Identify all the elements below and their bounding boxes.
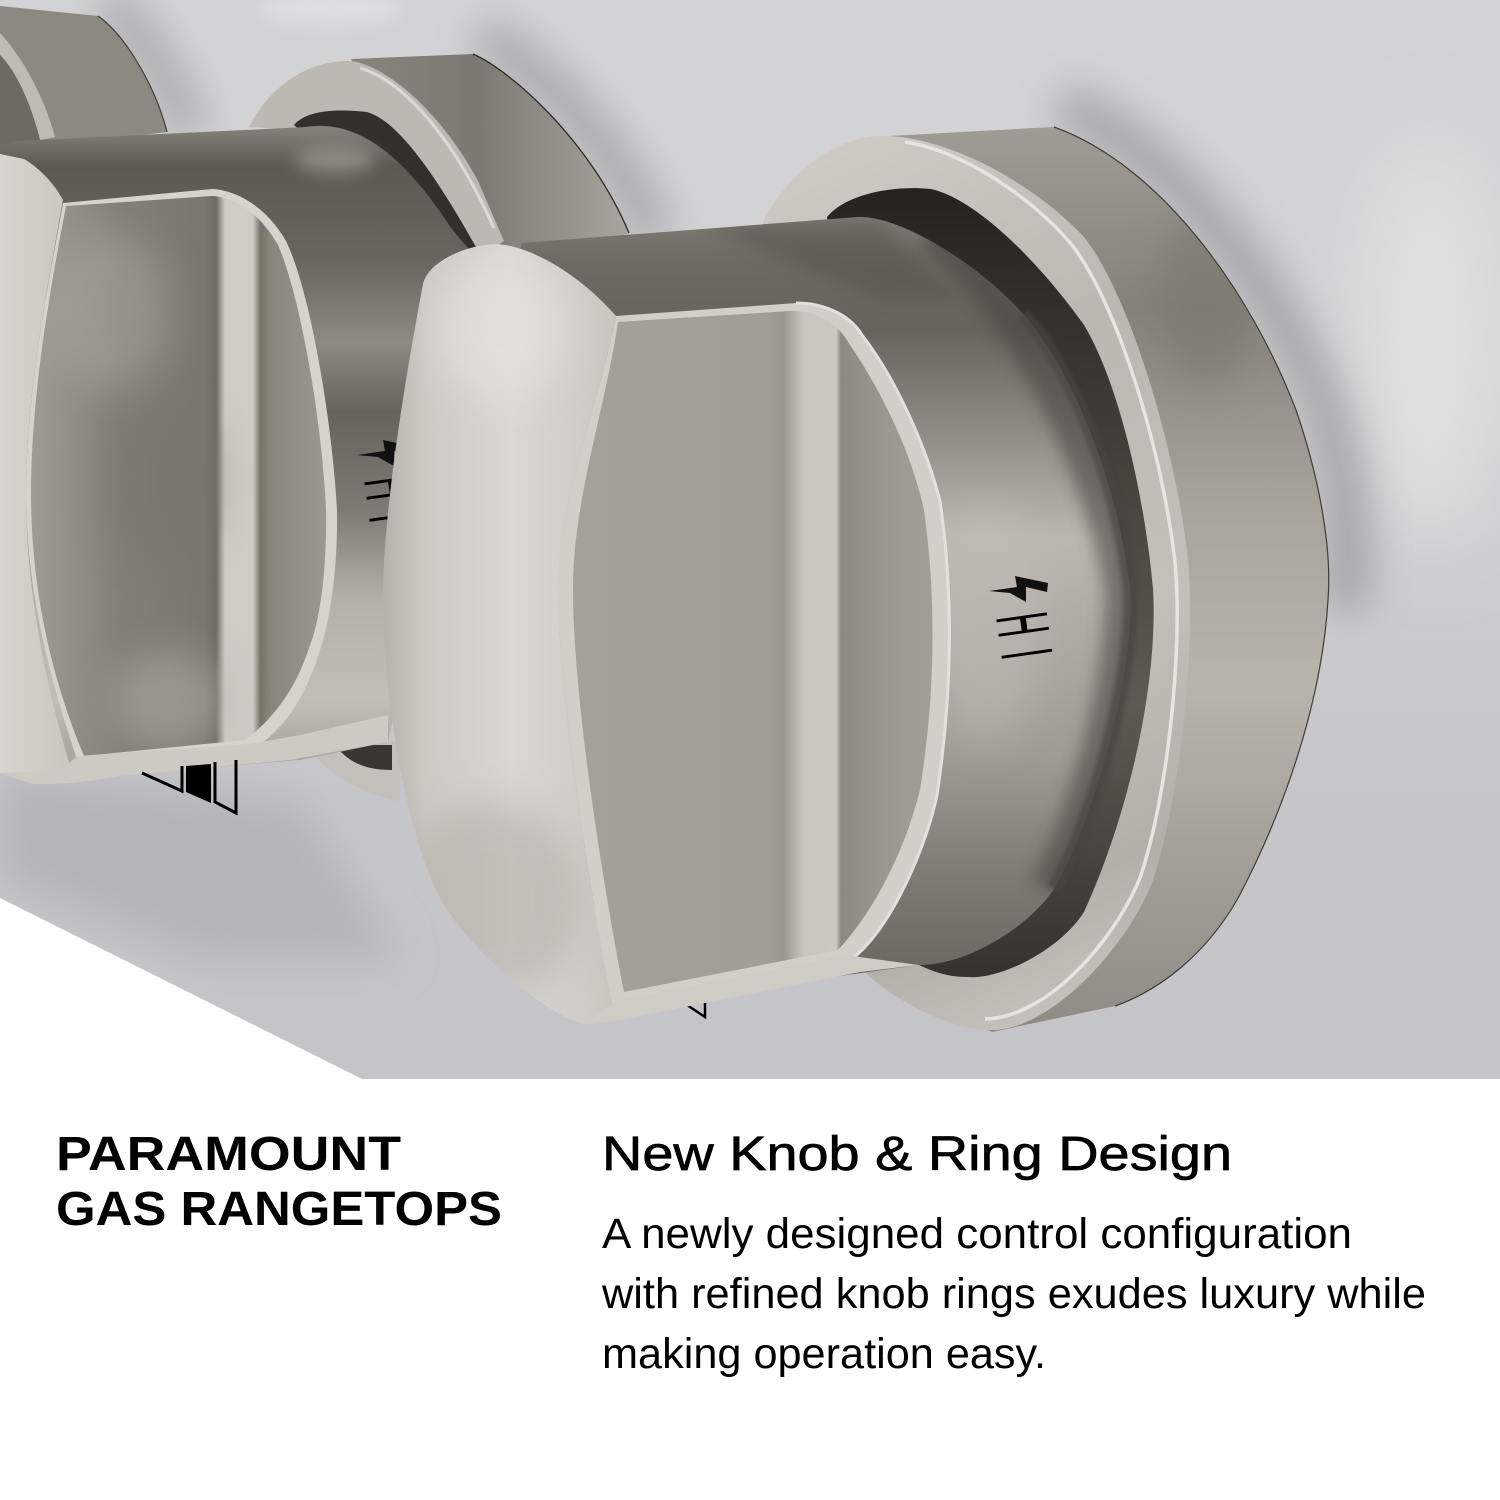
panel logo mark — [142, 760, 705, 1017]
middle knob: HI mark: HI — [347, 471, 437, 541]
feature heading: New Knob & Ring Design — [602, 1128, 1232, 1181]
middle knob: ring recess — [294, 110, 476, 248]
middle knob: stem — [0, 126, 480, 779]
middle knob: base cylinder — [351, 54, 628, 249]
middle knob — [0, 54, 629, 801]
middle knob: ring face — [249, 61, 504, 260]
middle knob: grip — [26, 189, 337, 762]
description line 3: making operation easy. — [602, 1330, 1046, 1378]
middle knob: lower ring — [310, 740, 400, 801]
steel panel background — [0, 0, 1500, 1080]
front knob: ring recess — [827, 188, 1154, 977]
front knob: HI mark — [989, 576, 1052, 659]
middle knob: HI mark — [358, 440, 396, 522]
front knob: grip — [558, 303, 949, 1024]
front knob: left lobe — [383, 244, 616, 1024]
front knob: ring face — [763, 136, 1190, 1030]
description line 2: with refined knob rings exudes luxury while — [601, 1270, 1426, 1318]
product title — [56, 1128, 502, 1236]
front knob: stem — [500, 217, 1130, 1006]
feature description — [601, 1210, 1426, 1378]
rear knob, partly cropped — [0, 6, 167, 150]
front knob: lower rim — [582, 955, 919, 1024]
front knob: HI mark: HI — [979, 608, 1069, 678]
title line 1: PARAMOUNT — [56, 1128, 401, 1181]
product photo: rangetop knobs — [0, 0, 1500, 1080]
description line 1: A newly designed control configuration — [602, 1210, 1352, 1258]
middle knob: left lobe — [0, 154, 70, 784]
front knob: base cylinder — [860, 127, 1329, 1032]
middle knob: lower rim — [0, 715, 388, 784]
front knob — [383, 127, 1329, 1032]
title line 2: GAS RANGETOPS — [56, 1183, 502, 1236]
